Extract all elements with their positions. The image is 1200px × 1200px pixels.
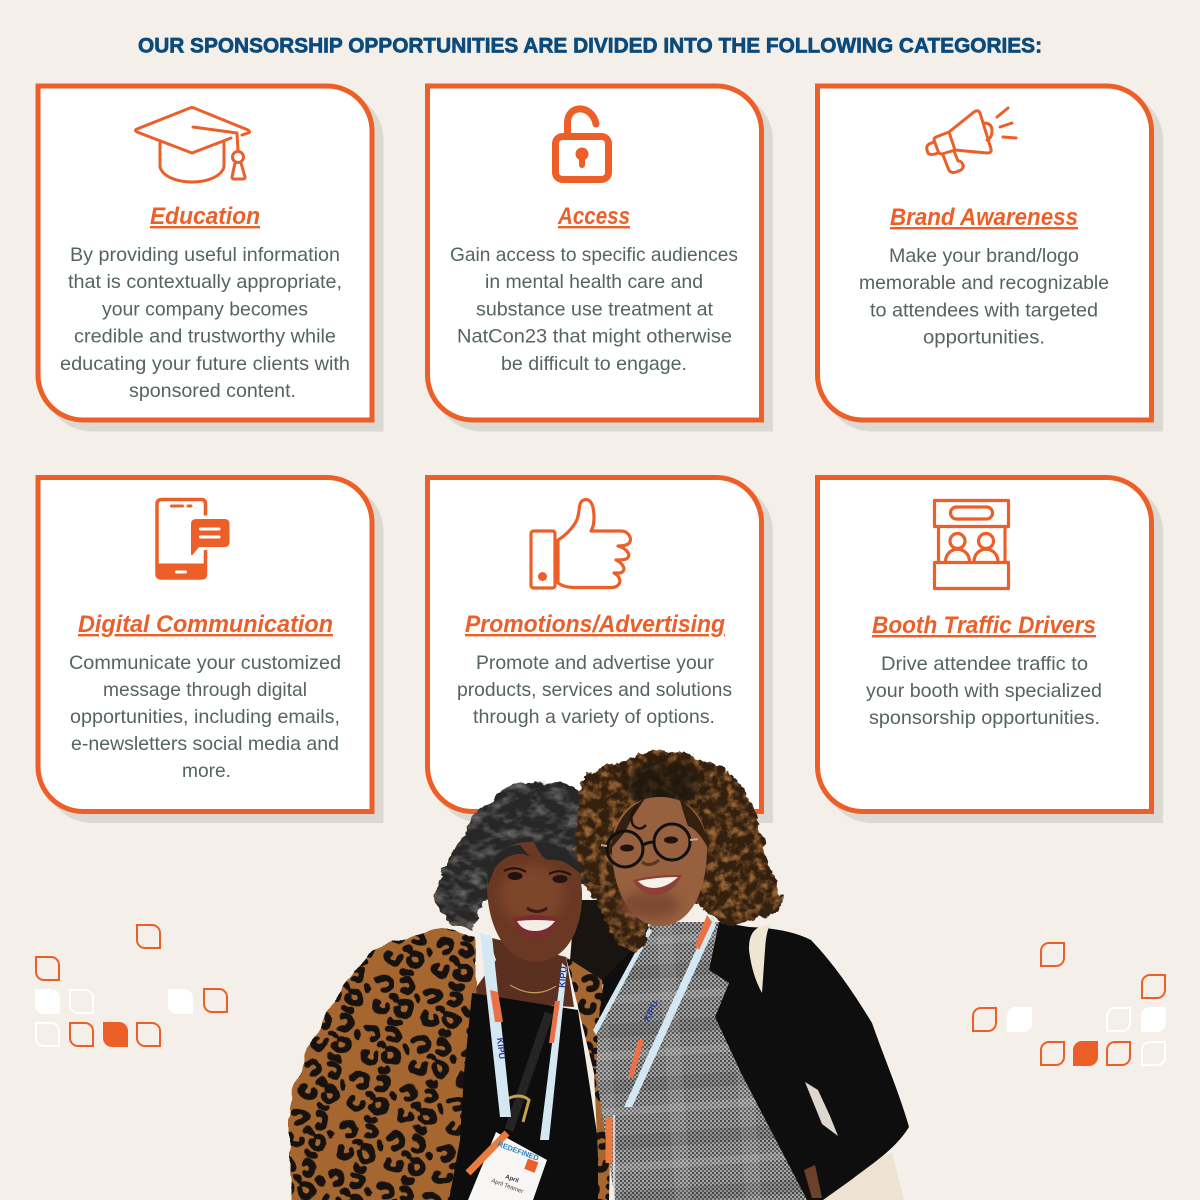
text: Education description: educating your future clients with xyxy=(60,353,350,375)
panel: Booth Traffic Drivers xyxy=(818,478,1160,820)
left attendee: lanyard: KIPU xyxy=(495,1037,507,1060)
text: Digital Communication description: message through digital xyxy=(103,679,307,701)
left attendee: hair xyxy=(435,781,590,930)
text: Access description: Gain access to specific audiences xyxy=(450,244,738,266)
text: Promotions/Advertising description: products, services and solutions xyxy=(457,679,732,701)
heading: Digital Communication: Digital Communication xyxy=(78,611,333,638)
left attendee: name badge: April Teamer xyxy=(490,1178,524,1195)
text: Education description: By providing useful information xyxy=(70,244,340,266)
left attendee: bag strap and buckle xyxy=(509,1013,549,1130)
text: Access description: substance use treatment at xyxy=(476,298,714,320)
title: OUR SPONSORSHIP OPPORTUNITIES ARE DIVIDED INTO THE FOLLOWING CATEGORIES: xyxy=(138,34,1042,58)
text: Digital Communication description: Communicate your customized xyxy=(69,652,341,674)
right attendee: lanyard xyxy=(593,913,716,1200)
left attendee: name badge: REDEFINED xyxy=(496,1139,541,1163)
heading: Brand Awareness: Brand Awareness xyxy=(890,204,1078,231)
text: Digital Communication description: e-newsletters social media and xyxy=(71,733,339,755)
text: Promotions/Advertising description: through a variety of options. xyxy=(473,706,715,728)
panel: Education xyxy=(38,86,381,429)
photo: two smiling attendees with lanyards xyxy=(290,750,909,1200)
icon: megaphone xyxy=(927,108,1016,172)
heading: Booth Traffic Drivers: Booth Traffic Drivers xyxy=(872,612,1096,639)
shadowed hair between the two attendees xyxy=(570,900,645,985)
left attendee: lanyard xyxy=(480,933,569,1140)
text: Promotions/Advertising description: Promote and advertise your xyxy=(476,652,714,674)
left attendee: face xyxy=(487,842,583,962)
right attendee: face xyxy=(601,797,709,926)
right attendee: dark crown of hair xyxy=(624,761,700,809)
text: Access description: in mental health care and xyxy=(485,271,703,293)
text: Access description: NatCon23 that might otherwise xyxy=(457,326,732,348)
text: Booth Traffic Drivers description: Drive attendee traffic to xyxy=(881,653,1088,675)
text: Education description xyxy=(60,244,350,402)
right attendee: body and blazer xyxy=(593,913,909,1200)
left attendee: name badge xyxy=(468,1132,547,1200)
left attendee: body and cardigan xyxy=(290,927,611,1200)
icon: open padlock xyxy=(556,109,608,180)
text: Digital Communication description: opportunities, including emails, xyxy=(70,706,340,728)
left attendee: name badge: April xyxy=(504,1174,520,1185)
text: Brand Awareness description: Make your brand/logo xyxy=(889,245,1079,267)
icon: phone with message xyxy=(157,500,230,578)
decorative squares: right group xyxy=(973,943,1165,1065)
text: Education description: sponsored content. xyxy=(129,380,296,402)
text: Booth Traffic Drivers description: your booth with specialized xyxy=(866,680,1102,702)
text: Brand Awareness description: memorable and recognizable xyxy=(859,272,1109,294)
heading: Promotions/Advertising: Promotions/Advertising xyxy=(465,611,725,638)
panel: Digital Communication xyxy=(38,478,381,820)
heading: Access: Access xyxy=(557,203,630,230)
panel: Promotions/Advertising xyxy=(428,478,770,820)
text: Promotions/Advertising description xyxy=(457,652,732,728)
right attendee: hair xyxy=(576,750,782,953)
text: Access description xyxy=(450,244,738,375)
icon: exhibit booth xyxy=(934,500,1008,588)
text: Digital Communication description: more. xyxy=(182,760,231,782)
text: Booth Traffic Drivers description: sponsorship opportunities. xyxy=(869,707,1100,729)
text: Brand Awareness description: opportunities. xyxy=(923,327,1045,349)
glasses xyxy=(601,824,698,867)
text: Access description: be difficult to engage. xyxy=(501,353,687,375)
text: Education description: credible and trustworthy while xyxy=(74,326,336,348)
text: Booth Traffic Drivers description xyxy=(866,653,1102,729)
decorative squares: left group xyxy=(36,925,227,1046)
text: Brand Awareness description xyxy=(859,245,1109,349)
text: Brand Awareness description: to attendees with targeted xyxy=(870,299,1098,321)
icon: thumbs up xyxy=(531,500,630,588)
panel: Access xyxy=(428,86,770,429)
left attendee: lanyard: KIPU xyxy=(557,966,569,988)
right attendee: lanyard: KIPU xyxy=(642,999,660,1023)
heading: Education: Education xyxy=(150,203,260,230)
icon: graduation cap xyxy=(136,108,250,182)
panel: Brand Awareness xyxy=(818,86,1160,429)
text: Digital Communication description xyxy=(69,652,341,782)
text: Education description: that is contextually appropriate, xyxy=(68,271,342,293)
text: Education description: your company becomes xyxy=(102,298,308,320)
